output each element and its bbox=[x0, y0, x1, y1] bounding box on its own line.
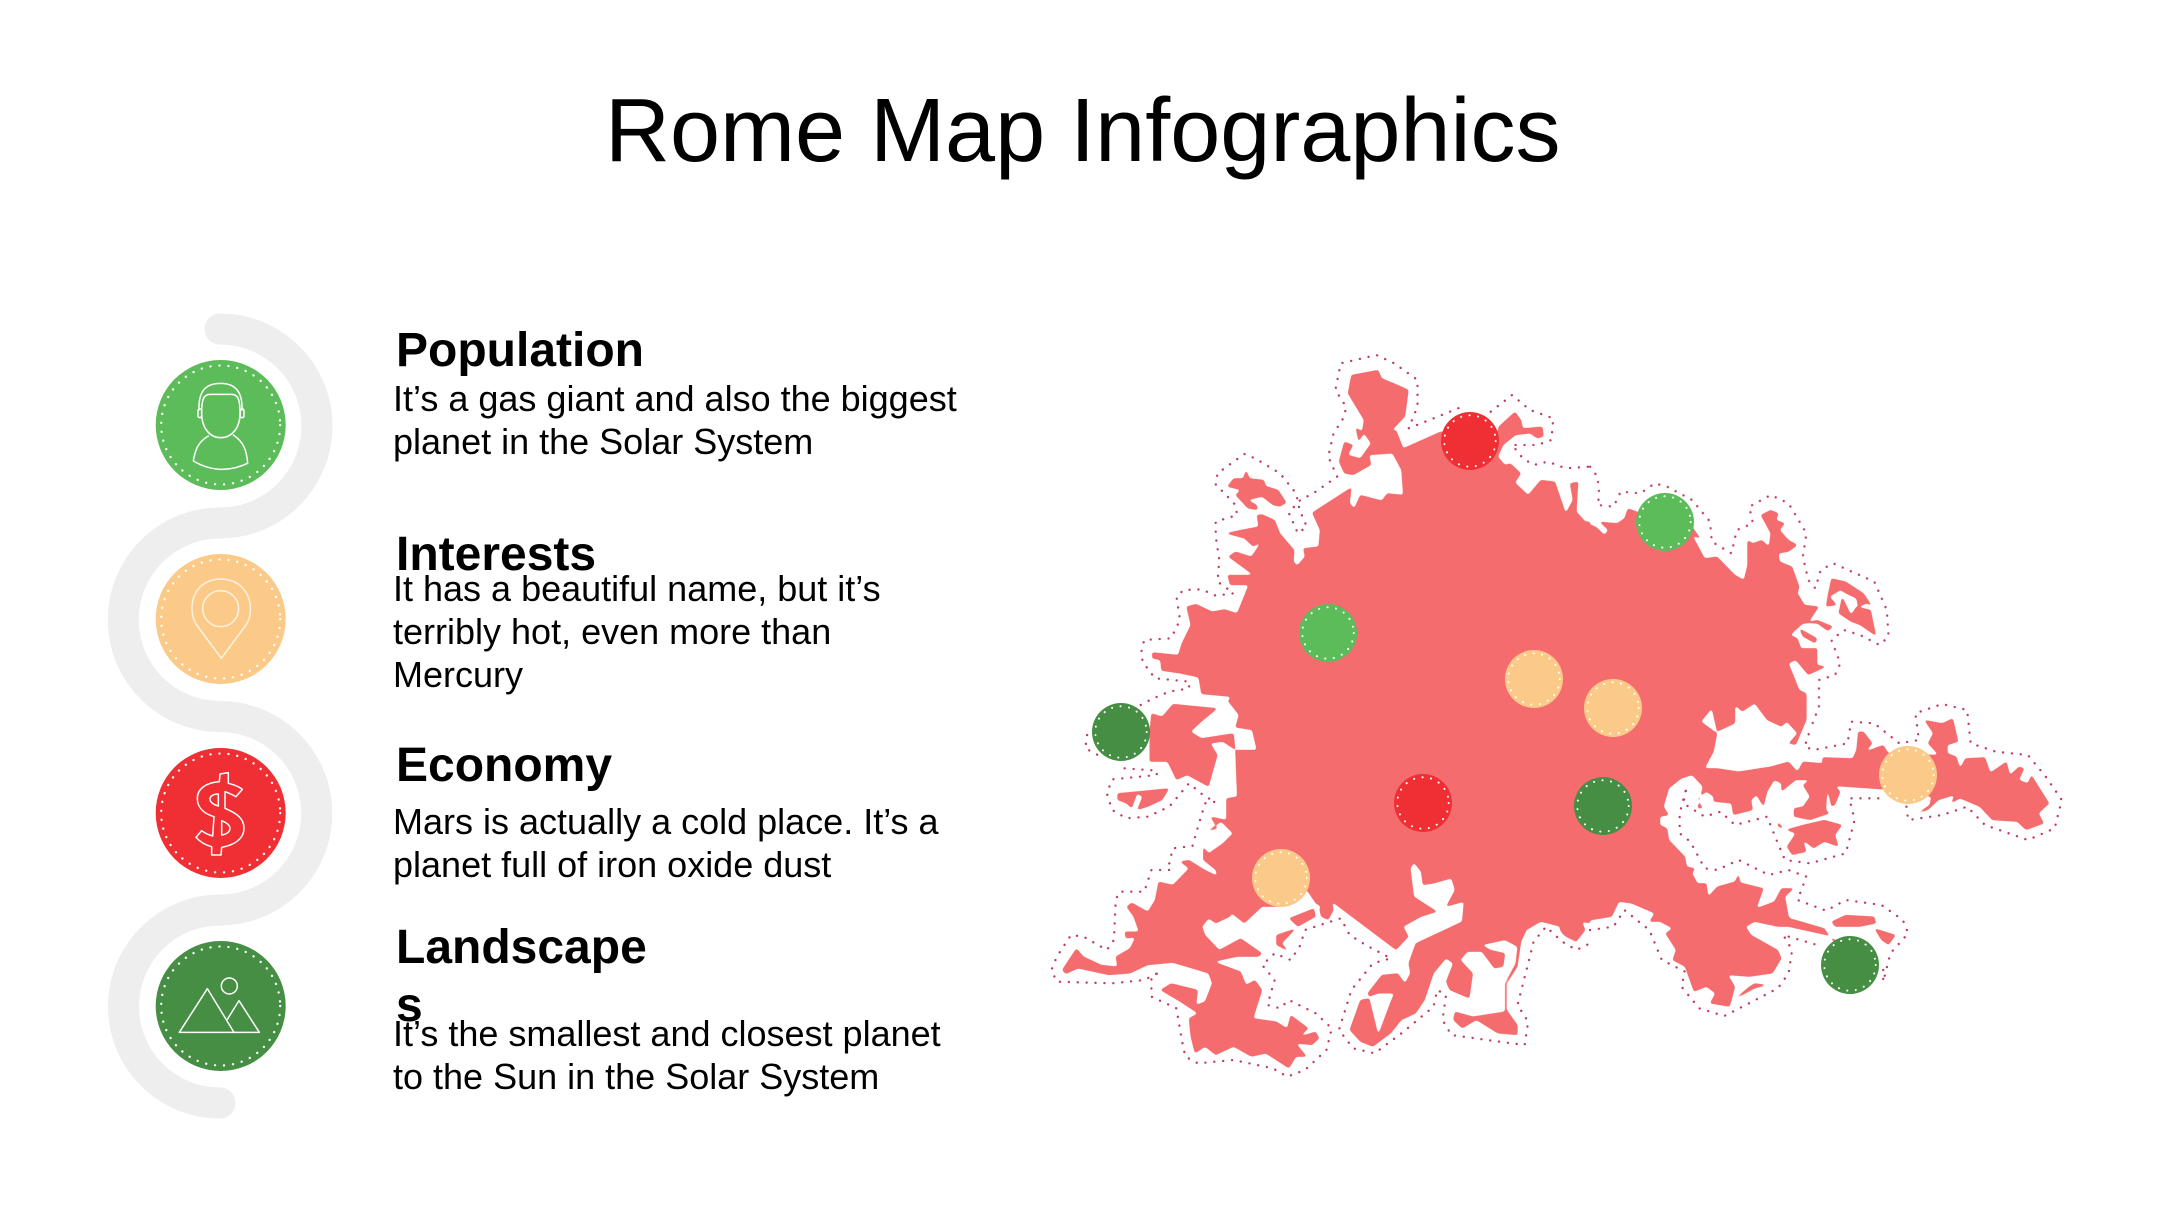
marker: green north-east bbox=[1636, 493, 1694, 551]
marker: beige centre bbox=[1505, 650, 1563, 708]
text block: economy: planet full of iron oxide dust bbox=[393, 844, 831, 885]
marker: beige centre right bbox=[1584, 679, 1642, 737]
icon badge: interests bbox=[156, 554, 286, 684]
marker: beige south-west bbox=[1252, 849, 1310, 907]
text block: landscapes: It’s the smallest and closest planet bbox=[393, 1013, 941, 1054]
text block: population: Population bbox=[396, 324, 644, 377]
text block: economy: Economy bbox=[396, 739, 612, 792]
icon badge: economy bbox=[156, 748, 286, 878]
text block: interests: Mercury bbox=[393, 654, 523, 695]
serpentine connector bbox=[123, 329, 317, 1103]
map dotted outline bbox=[1051, 355, 2062, 1077]
text block: landscapes: s bbox=[396, 979, 423, 1032]
text block: landscapes: Landscape bbox=[396, 921, 647, 974]
map land bbox=[1062, 370, 2049, 1068]
marker: dark green south-east bbox=[1821, 936, 1879, 994]
text block: population: It’s a gas giant and also the biggest bbox=[393, 378, 957, 419]
icon badge: landscapes bbox=[156, 941, 286, 1071]
marker: beige east bbox=[1879, 746, 1937, 804]
marker: green west bbox=[1299, 604, 1357, 662]
text block: economy bbox=[393, 739, 940, 885]
text block: interests: terribly hot, even more than bbox=[393, 611, 831, 652]
text block: economy: Mars is actually a cold place. It’s a bbox=[393, 801, 940, 842]
text block: interests: Interests bbox=[396, 528, 596, 581]
marker: red centre bbox=[1394, 774, 1452, 832]
title: Rome Map Infographics bbox=[605, 81, 1560, 181]
text block: interests: It has a beautiful name, but it’s bbox=[393, 568, 881, 609]
text block: population: planet in the Solar System bbox=[393, 421, 813, 462]
marker: red north bbox=[1441, 412, 1499, 470]
text block: landscapes bbox=[393, 921, 941, 1097]
text block: population bbox=[393, 324, 957, 462]
map markers bbox=[1092, 412, 1937, 994]
text block: landscapes: to the Sun in the Solar System bbox=[393, 1056, 879, 1097]
icon badge: population bbox=[156, 360, 286, 490]
text block: interests bbox=[393, 528, 881, 695]
marker: dark green far west bbox=[1092, 703, 1150, 761]
Rome map bbox=[1051, 355, 2062, 1077]
marker: dark green centre bbox=[1574, 777, 1632, 835]
